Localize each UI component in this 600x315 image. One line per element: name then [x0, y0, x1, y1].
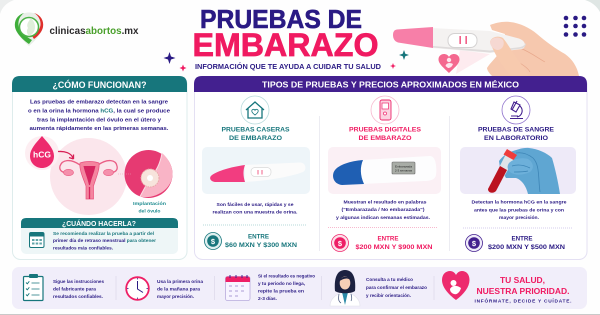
illustration: blood sample — [460, 147, 576, 194]
text: home test description: realizan con una muestra de orina. — [212, 210, 298, 214]
decorative sparkles — [164, 50, 409, 72]
text: digital test description: y algunas indican semanas estimadas. — [336, 215, 430, 220]
illustration: ovule implantation — [118, 150, 172, 198]
closing message — [442, 271, 572, 304]
heading: cómo funcionan: ¿CÓMO FUNCIONAN? — [52, 79, 147, 90]
illustration: digital test: Embarazada — [395, 164, 412, 168]
logo wordmark: clinicasabortos.mx — [50, 26, 139, 37]
price: blood test: $200 MXN Y $500 MXN — [488, 244, 566, 251]
text: home test description: Son fáciles de usar, rápidas y se — [216, 202, 294, 207]
arrow: hormone to uterus — [58, 151, 74, 159]
hand, back — [487, 22, 579, 76]
text: when to test: primer día de retraso menstrual para obtener — [53, 238, 156, 243]
heading: cómo funcionan — [12, 76, 187, 92]
heading: tipos de pruebas — [194, 76, 587, 92]
heading: pruebas caseras — [222, 126, 290, 142]
price: digital test: $ — [338, 239, 343, 248]
text: digital test description — [336, 200, 430, 220]
icon: calendar — [226, 275, 250, 300]
text: blood test description: antes que las pruebas de orina y con — [474, 208, 564, 212]
price: digital test: $200 MXN Y $900 MXN — [356, 244, 433, 251]
text: nuestra prioridad: NUESTRA PRIORIDAD. — [476, 286, 570, 296]
text: when to test: resultados más confiables. — [53, 246, 113, 250]
text — [258, 274, 315, 301]
text: resultados confiables. — [53, 294, 103, 299]
illustration: uterus circle — [50, 138, 127, 215]
price: home test: $60 MXN Y $300 MXN — [225, 242, 298, 249]
decorative dot grid — [564, 16, 586, 37]
heading: cuándo hacerla: ¿CUÁNDO HACERLA? — [62, 219, 136, 228]
tip: morning urine — [126, 277, 204, 300]
text — [366, 277, 427, 298]
text: explanation — [28, 100, 170, 132]
illustration: home test — [202, 147, 310, 194]
heart badge — [438, 54, 460, 73]
text: Si el resultado es negativo — [258, 274, 315, 278]
icon: doctor — [330, 270, 360, 306]
price: home test: $ — [211, 237, 216, 246]
icon: hCG drop — [25, 136, 59, 170]
price: home test: ENTRE — [248, 234, 269, 240]
title line 2: EMBARAZO — [192, 27, 378, 63]
illustration: digital test — [328, 147, 441, 194]
text: Consulta a tu médico — [366, 277, 413, 282]
icon: clipboard — [24, 274, 43, 300]
pregnancy test held in a hand — [393, 22, 579, 76]
column: pruebas digitales — [328, 96, 441, 252]
panel: tips band — [12, 267, 587, 309]
text: repite la prueba en — [258, 288, 304, 294]
text: y recibir orientación. — [366, 293, 411, 298]
tube — [488, 154, 514, 193]
logo: clinicasabortos.mx — [15, 12, 139, 46]
icon: microscope — [502, 96, 530, 124]
glove behind the tube — [499, 148, 560, 194]
price: blood test: $ — [472, 239, 477, 248]
price: digital test — [332, 234, 433, 252]
text: explanation: tras la implantación del óvulo en el útero y — [37, 118, 161, 124]
text: para confirmar el embarazo — [366, 285, 427, 290]
price: digital test: ENTRE — [378, 236, 398, 242]
price: home test — [204, 232, 298, 250]
icon: logo pin — [15, 12, 43, 46]
icon: digital test — [371, 96, 399, 124]
tip: doctor — [330, 270, 427, 306]
heading: tipos de pruebas: TIPOS DE PRUEBAS Y PRECIOS APROXIMADOS EN MÉXICO — [262, 79, 520, 90]
test pink cap — [393, 27, 433, 48]
icon: heart with mother and child — [442, 271, 470, 300]
title line 1: PRUEBAS DE — [200, 6, 362, 34]
text — [157, 279, 204, 299]
text: explanation: aumenta rápidamente en las primeras semanas. — [30, 126, 169, 132]
heading: pruebas de sangre: EN LABORATORIO — [484, 135, 548, 142]
icon: calendar — [30, 232, 44, 248]
icon: hCG drop: hCG — [33, 150, 51, 160]
icon: house with heart — [241, 96, 269, 124]
column: pruebas caseras — [202, 96, 310, 250]
subtitle: INFORMACIÓN QUE TE AYUDA A CUIDAR TU SALUD — [195, 62, 381, 71]
text: mayor precisión. — [157, 294, 194, 299]
price: blood test — [466, 234, 566, 252]
panel: cuándo hacerla — [21, 218, 178, 254]
label: implantación del óvulo: del óvulo — [138, 208, 161, 214]
price: blood test: ENTRE — [512, 236, 532, 242]
text — [53, 279, 104, 299]
heading: pruebas digitales — [349, 126, 422, 142]
icon: clock — [126, 277, 149, 300]
text: blood test description: Detectan la hormona hCG en la sangre — [472, 200, 567, 204]
text: Usa la primera orina — [157, 279, 204, 284]
text: blood test description: mayor precisión. — [499, 215, 539, 220]
glove fingers in front — [508, 158, 533, 175]
heading: pruebas de sangre: PRUEBAS DE SANGRE — [478, 126, 555, 134]
test body — [431, 28, 525, 53]
heading: cuándo hacerla — [21, 218, 178, 228]
title — [192, 6, 381, 71]
text: blood test description — [472, 200, 567, 220]
text: informate: INFÓRMATE, DECIDE Y CUÍDATE. — [474, 296, 572, 304]
heading: pruebas digitales: DE EMBARAZO — [358, 135, 412, 142]
text: Sigue las instrucciones — [53, 279, 104, 284]
text: home test description — [212, 202, 298, 214]
panel: tipos de pruebas — [194, 76, 587, 260]
text: tu salud: TU SALUD, — [500, 275, 545, 285]
text: del fabricante para — [53, 286, 97, 292]
text: explanation: Las pruebas de embarazo detectan en la sangre — [30, 100, 168, 106]
thumb — [490, 37, 529, 76]
heading: pruebas digitales: PRUEBAS DIGITALES — [349, 126, 422, 134]
tip: instructions — [24, 274, 104, 300]
test window — [448, 34, 477, 48]
column: pruebas de sangre — [460, 96, 576, 252]
label: implantación del óvulo — [133, 201, 166, 214]
illustration: digital test: 2-3 semanas — [395, 168, 413, 172]
heading: pruebas de sangre — [478, 126, 555, 142]
heading: pruebas caseras: PRUEBAS CASERAS — [222, 126, 290, 134]
pale beam to heart — [456, 50, 490, 74]
text: when to test: Se recomienda realizar la prueba a partir del — [53, 231, 154, 236]
tip: repeat test — [226, 274, 315, 301]
text: when to test — [53, 231, 156, 250]
text: 2-3 días. — [258, 296, 277, 301]
panel: cómo funcionan — [12, 76, 187, 260]
text: explanation: o en la orina la hormona hCG , la cual se produce — [28, 108, 170, 114]
column dividers — [320, 116, 450, 251]
heading: pruebas caseras: DE EMBARAZO — [229, 135, 282, 142]
text: digital test description: Muestran el resultado en palabras — [344, 200, 427, 204]
text: de la mañana para — [157, 286, 201, 292]
text: digital test description: ("Embarazada / No embarazada") — [342, 207, 425, 212]
label: implantación del óvulo: Implantación — [133, 201, 166, 207]
text: y tu periodo no llega, — [258, 281, 305, 286]
